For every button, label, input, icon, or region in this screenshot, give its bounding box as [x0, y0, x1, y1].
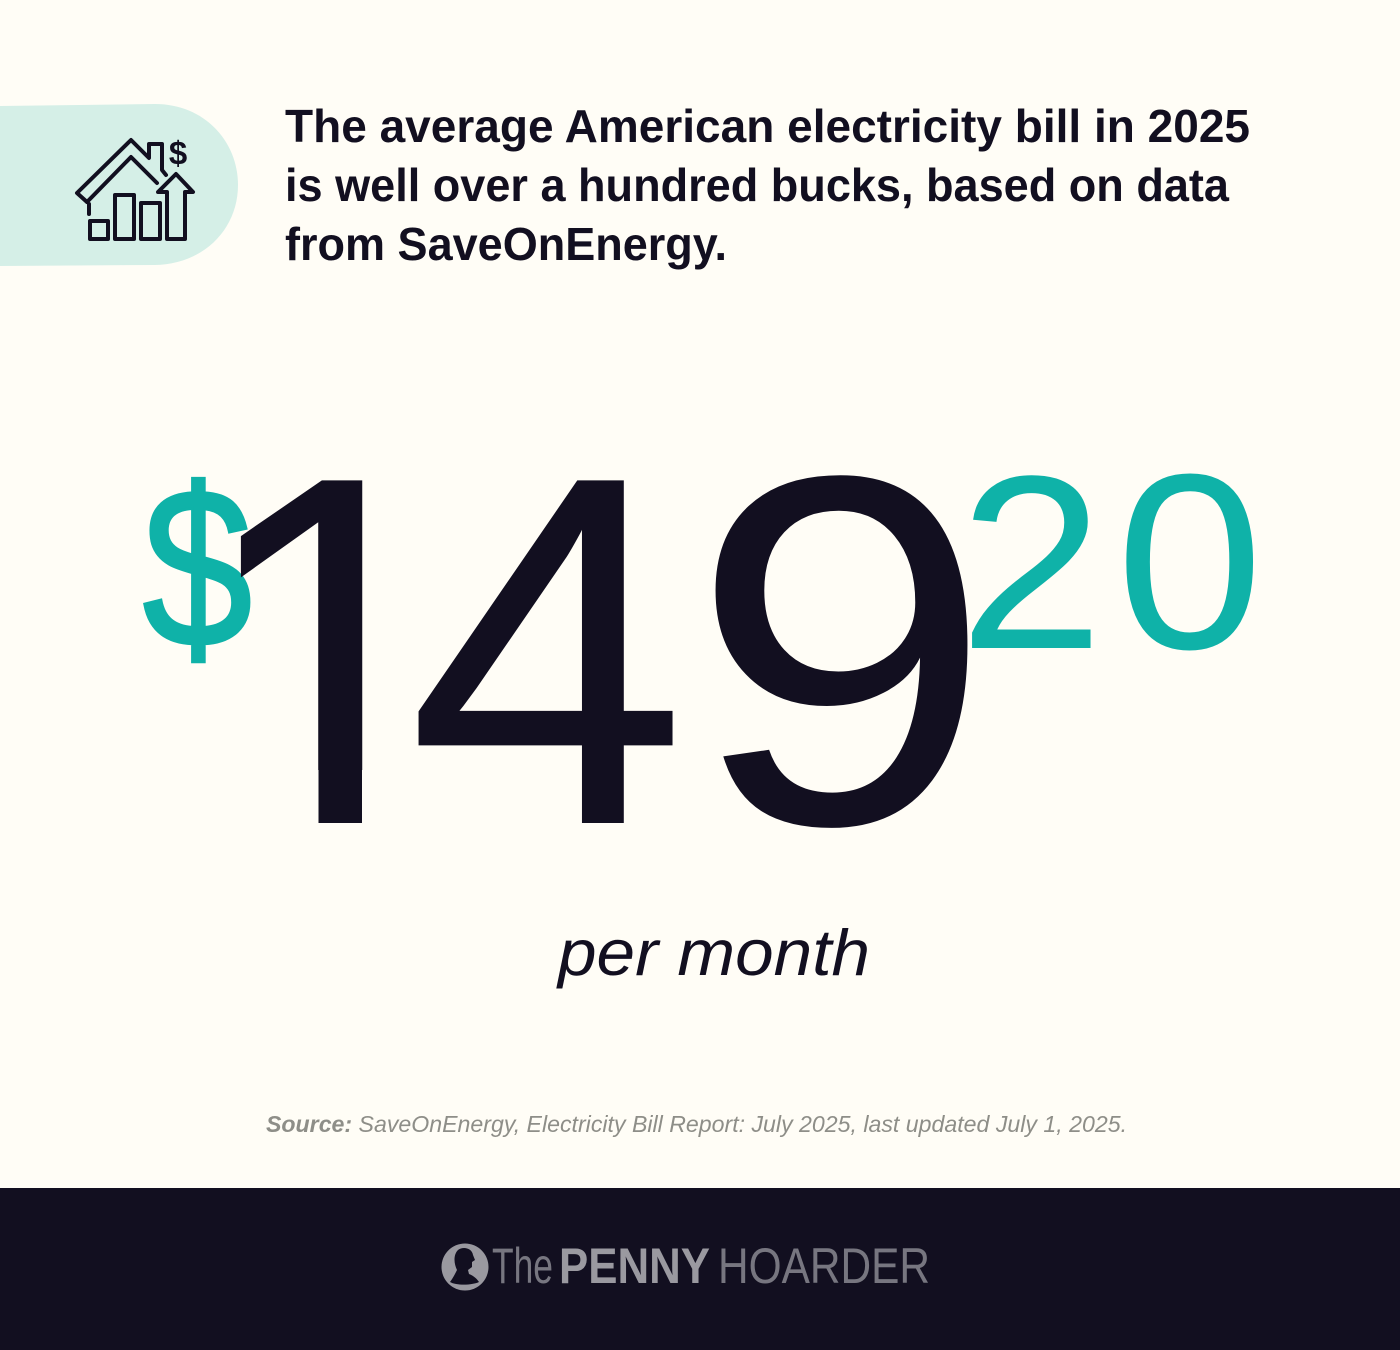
- heading text: [285, 100, 1250, 270]
- icon badge: house with rising bars: $: [169, 134, 187, 172]
- footer band: [0, 1188, 1400, 1350]
- source line: Source: SaveOnEnergy, Electricity Bill Report: July 2025, last updated July 1, 2025.: [266, 1111, 1127, 1137]
- footer logo: PENNY: [559, 1238, 710, 1294]
- digit 9: 9: [690, 372, 993, 929]
- cents 20: 2: [959, 424, 1104, 701]
- icon: penny silhouette: [442, 1244, 488, 1290]
- cents 20: [959, 422, 1263, 701]
- digit 4: 4: [407, 373, 687, 929]
- cents 20: 0: [1116, 422, 1263, 701]
- heading text: The average American electricity bill in 2025: [285, 100, 1250, 152]
- big number: $149.20: [142, 372, 1263, 929]
- footer logo: [442, 1238, 930, 1294]
- dollar sign: $: [142, 441, 252, 694]
- heading text: from SaveOnEnergy.: [285, 218, 727, 270]
- footer logo: The: [492, 1238, 553, 1294]
- icon badge: house with rising bars: [0, 104, 238, 266]
- heading text: is well over a hundred bucks, based on data: [285, 159, 1229, 211]
- digit 1: 1: [193, 372, 470, 929]
- per month label: per month: [556, 916, 870, 989]
- footer logo: HOARDER: [718, 1238, 930, 1294]
